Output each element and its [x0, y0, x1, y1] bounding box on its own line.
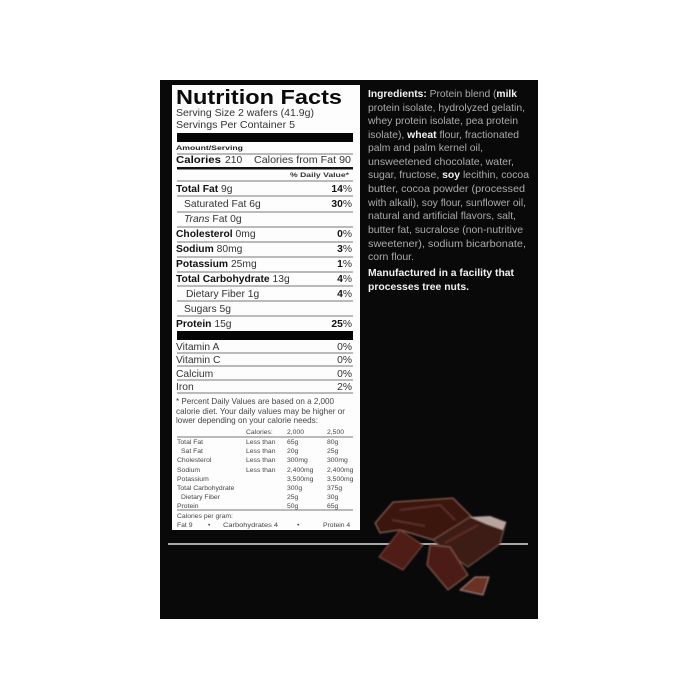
ingredients text: butter fat, sucralose (non-nutritive — [368, 225, 523, 236]
daily values table: Sodium — [177, 467, 200, 474]
daily values table: Dietary Fiber — [181, 494, 221, 501]
nutrient rows: 4% — [337, 289, 352, 300]
ingredients text: protein isolate, hydrolyzed gelatin, — [368, 103, 525, 114]
nutrient rows: Protein 15g — [176, 319, 232, 330]
vitamins and minerals: 0% — [337, 355, 352, 366]
nutrient rows: 25% — [331, 319, 352, 330]
amount per serving and calories: Calories — [176, 155, 221, 166]
daily values table: 30g — [327, 494, 339, 501]
daily values table: Calories: — [246, 429, 273, 436]
vitamins and minerals: Iron — [176, 382, 194, 393]
ingredients text: corn flour. — [368, 252, 414, 263]
amount per serving and calories: 210 — [225, 155, 242, 166]
amount per serving and calories: Amount/Serving — [176, 145, 243, 152]
daily values table: Sat Fat — [181, 448, 203, 455]
daily values table: 3,500mg — [287, 476, 314, 483]
ingredients text: Ingredients: Protein blend (milk — [368, 89, 517, 100]
allergen statement: processes tree nuts. — [368, 282, 469, 293]
footnote: lower depending on your calorie needs: — [176, 416, 318, 425]
daily values table: Fat 9 — [177, 522, 193, 529]
daily values table: 65g — [287, 439, 299, 446]
amount per serving and calories: % Daily Value* — [290, 172, 350, 179]
daily values table: Total Carbohydrate — [177, 485, 235, 492]
nutrient rows: Total Fat 9g — [176, 184, 233, 195]
vitamins and minerals: 0% — [337, 342, 352, 353]
allergen statement — [368, 268, 515, 293]
footnote: calorie diet. Your daily values may be higher or — [176, 407, 345, 416]
horizontal divider line — [168, 543, 528, 545]
vitamins and minerals — [176, 342, 353, 393]
serving info: Serving Size 2 wafers (41.9g) — [176, 108, 314, 119]
vitamins and minerals: 0% — [337, 369, 352, 380]
nutrient rows: 14% — [331, 184, 352, 195]
daily values table: 25g — [327, 448, 339, 455]
daily values table: 375g — [327, 485, 342, 492]
nutrient rows: Cholesterol 0mg — [176, 229, 256, 240]
ingredients text: whey protein isolate, pea protein — [367, 116, 518, 127]
ingredients text: sugar, fructose, soy lecithin, cocoa — [368, 170, 529, 181]
dark panel background — [160, 80, 538, 619]
ingredients text: butter, cocoa powder (processed — [368, 184, 525, 195]
daily values table: Less than — [246, 448, 276, 455]
daily values table: Carbohydrates 4 — [223, 522, 278, 529]
daily values table: 65g — [327, 503, 339, 510]
panel: nutrition facts label — [172, 85, 360, 530]
daily values table: Total Fat — [177, 439, 203, 446]
daily values table: 80g — [327, 439, 339, 446]
daily values table: 2,000 — [287, 429, 304, 436]
nutrient rows: 4% — [337, 274, 352, 285]
serving info: Servings Per Container 5 — [176, 120, 295, 131]
nutrient rows: Dietary Fiber 1g — [186, 289, 260, 300]
daily values table: 300mg — [327, 457, 348, 464]
daily values table: Less than — [246, 439, 276, 446]
vitamins and minerals: Vitamin A — [176, 342, 219, 353]
nutrient rows: Trans Fat 0g — [184, 214, 242, 225]
vitamins and minerals: 2% — [337, 382, 352, 393]
daily values table: Calories per gram: — [177, 513, 233, 520]
nutrient rows: Sugars 5g — [184, 304, 231, 315]
daily values table: Protein 4 — [323, 522, 350, 529]
daily values table: Cholesterol — [177, 457, 212, 464]
vitamins and minerals: Calcium — [176, 369, 213, 380]
allergen statement: Manufactured in a facility that — [368, 268, 515, 279]
daily values table: Potassium — [177, 476, 209, 483]
daily values table: • — [208, 522, 211, 529]
nutrient rows: 3% — [337, 244, 352, 255]
heading: Nutrition Facts: Nutrition Facts — [176, 87, 342, 109]
daily values table: 2,400mg — [287, 467, 314, 474]
nutrient rows: 30% — [331, 199, 352, 210]
ingredients text: with alkali), soy flour, sunflower oil, — [367, 198, 526, 209]
ingredients text — [367, 89, 529, 263]
daily values table: 2,500 — [327, 429, 344, 436]
footnote — [176, 397, 345, 425]
daily values table: 50g — [287, 503, 299, 510]
nutrient rows: 1% — [337, 259, 352, 270]
amount per serving and calories — [176, 145, 353, 181]
footnote: * Percent Daily Values are based on a 2,000 — [176, 397, 334, 406]
daily values table: 20g — [287, 448, 299, 455]
daily values table: 2,400mg — [327, 467, 354, 474]
daily values table: 25g — [287, 494, 299, 501]
nutrient rows: Potassium 25mg — [176, 259, 257, 270]
nutrient rows: Saturated Fat 6g — [184, 199, 261, 210]
ingredients text: palm and palm kernel oil, — [368, 143, 483, 154]
ingredients text: isolate), wheat flour, fractionated — [368, 130, 519, 141]
daily values table: Protein — [177, 503, 199, 510]
daily values table: 300g — [287, 485, 302, 492]
daily values table — [177, 429, 354, 529]
serving info — [176, 108, 314, 131]
vitamins and minerals: Vitamin C — [176, 355, 221, 366]
nutrient rows: 0% — [337, 229, 352, 240]
nutrient rows: Total Carbohydrate 13g — [176, 274, 290, 285]
icon: chocolate chunks — [375, 498, 506, 595]
daily values table: Less than — [246, 467, 276, 474]
daily values table: 300mg — [287, 457, 308, 464]
ingredients text: sweetener), sodium bicarbonate, — [368, 239, 526, 250]
daily values table: • — [297, 522, 300, 529]
daily values table: 3,500mg — [327, 476, 354, 483]
nutrient rows: Sodium 80mg — [176, 244, 243, 255]
amount per serving and calories: Calories from Fat 90 — [254, 155, 351, 166]
daily values table: Less than — [246, 457, 276, 464]
ingredients text: natural and artificial flavors, salt, — [368, 211, 516, 222]
ingredients text: unsweetened chocolate, water, — [368, 157, 514, 168]
nutrient rows — [176, 184, 353, 330]
